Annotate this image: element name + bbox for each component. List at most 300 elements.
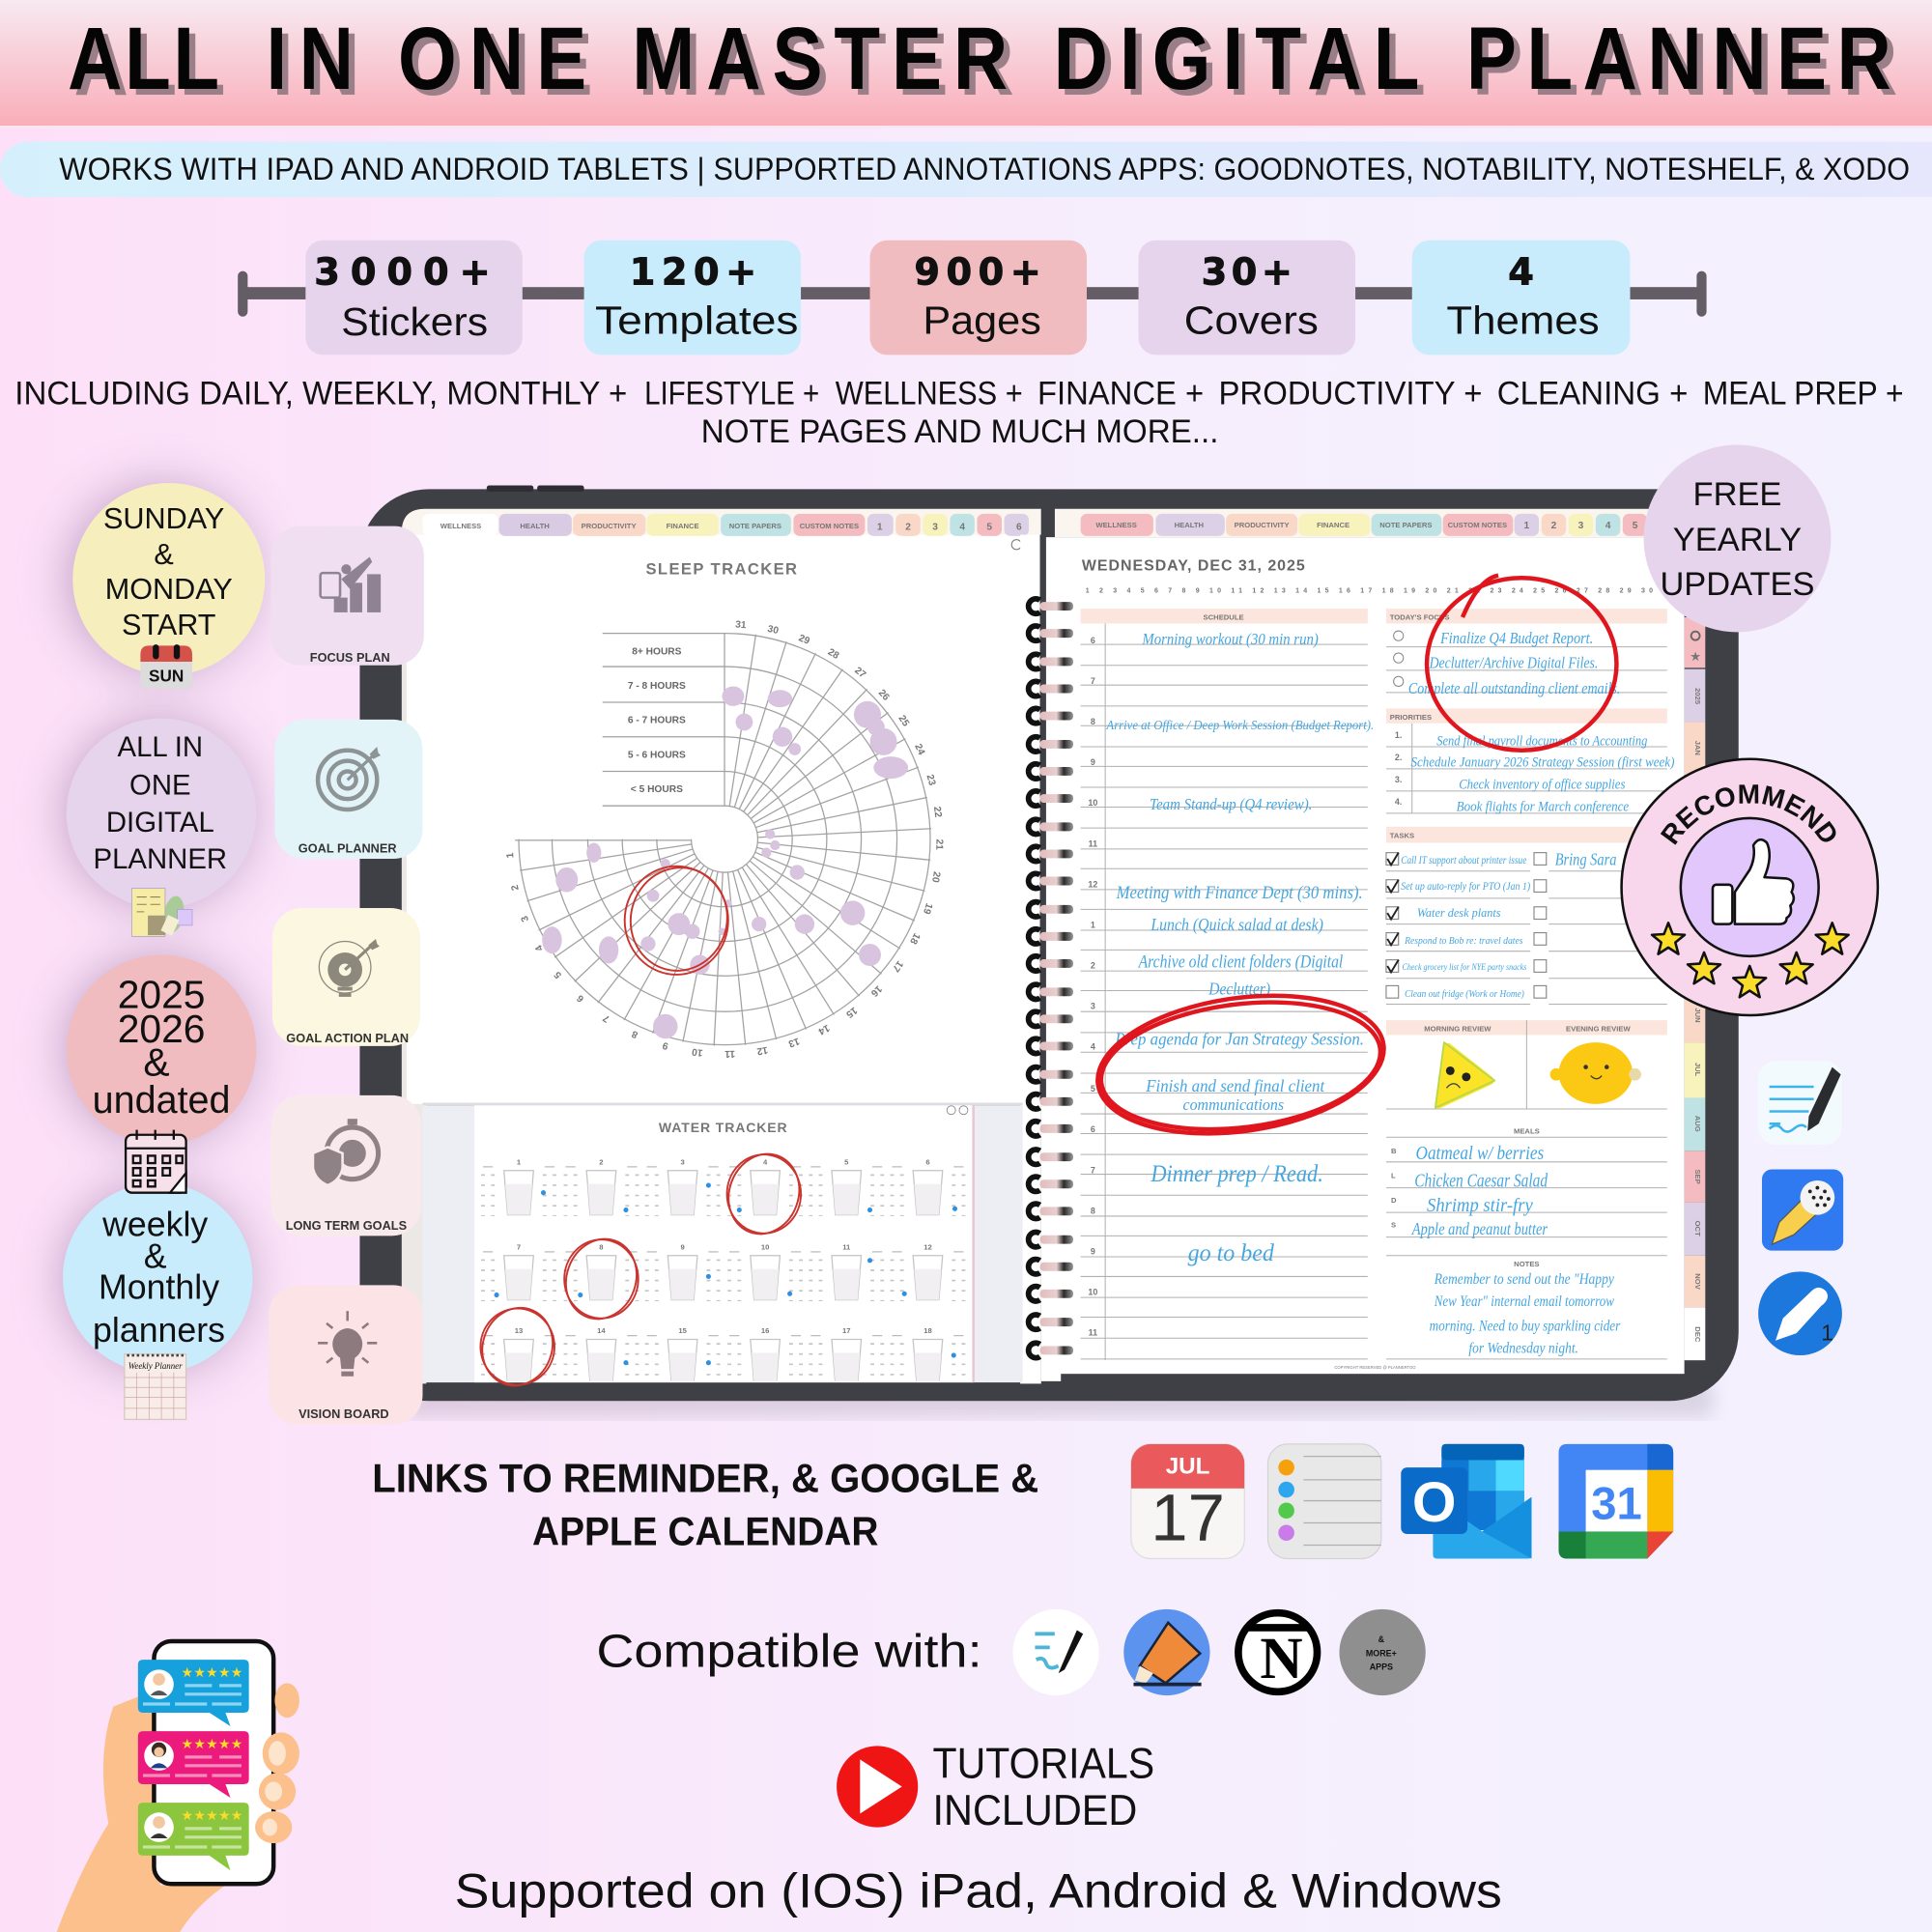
title banner: DIGITAL [1054,10,1419,108]
schedule column: Arrive at Office / Deep Work Session (Budget Report). [1105,718,1374,733]
card: focus plan [271,526,424,666]
tabs right page: 3 [1578,521,1584,531]
priorities: 2. [1395,753,1402,762]
schedule column: 10 [1088,798,1097,808]
month side tabs: DEC [1693,1326,1702,1343]
includes text: CLEANING + [1497,375,1688,412]
schedule column: go to bed [1188,1238,1274,1266]
tabs left page: 4 [959,522,965,532]
tabs left page [423,514,1029,536]
priorities: Check inventory of office supplies [1459,777,1626,792]
notes: NOTES [1514,1260,1540,1268]
priorities: 4. [1395,797,1402,807]
icon: reminders [1267,1444,1381,1559]
water cups grid: 3 [681,1157,685,1166]
icon: bulb and arrow [319,939,380,997]
month side tabs: 2025 [1693,688,1702,705]
includes text: NOTE PAGES AND MUCH MORE... [701,413,1218,450]
icon: outlook: O [1412,1471,1457,1534]
circle: sunday and monday start: START [122,609,216,641]
priorities: Send final payroll documents to Accounting [1436,734,1647,750]
left page: sleep tracker [407,514,1041,1104]
tasks: Bring Sara [1555,849,1617,868]
circle: all in one digital planner: ONE [129,770,191,802]
water cups grid: 15 [678,1326,688,1335]
review bubble: blue [138,1660,249,1726]
notes: Remember to send out the "Happy [1434,1271,1614,1288]
notes: for Wednesday night. [1468,1341,1578,1357]
tabs left page: HEALTH [520,522,550,530]
meals: B [1391,1147,1397,1155]
red scribble: agenda [1089,979,1393,1151]
sleep tracker radial chart: 2 [510,883,522,892]
sleep tracker radial chart: 13 [786,1036,801,1049]
heading: calendar links: APPLE CALENDAR [532,1508,878,1553]
circle: all in one digital planner: ALL IN [118,731,203,763]
sleep tracker radial chart: 7 - 8 HOURS [628,681,686,692]
water cups grid: 4 [763,1157,768,1166]
title banner: ALL [74,15,225,115]
schedule column: 11 [1089,838,1097,848]
schedule column: 9 [1091,1246,1095,1256]
sleep tracker radial chart: 23 [923,774,937,787]
sleep tracker radial chart: 25 [896,714,911,729]
icon: thumbs up [1713,839,1794,924]
circle: weekly and monthly planners: planners [93,1311,225,1350]
title banner: ONE [398,10,586,108]
water cups grid: 17 [842,1326,851,1335]
schedule column: SCHEDULE [1204,613,1244,622]
title banner [0,0,1932,128]
water cups grid: 7 [517,1242,521,1251]
tasks: Clean out fridge (Work or Home) [1405,988,1524,1000]
icon: play button [837,1746,918,1828]
heading: calendar links [372,1456,1038,1553]
badge: free yearly updates [1644,444,1831,632]
schedule column: Finish and send final client [1145,1076,1325,1095]
card: goal planner: GOAL PLANNER [298,841,397,856]
sleep tracker radial chart: 10 [691,1046,703,1058]
tabs left page: PRODUCTIVITY [582,522,637,530]
sleep tracker radial chart: 1 [505,852,516,859]
stat: stickers: Stickers [341,299,488,344]
sleep tracker radial chart: 16 [868,983,884,999]
sleep tracker radial chart: 29 [797,633,811,647]
heading: water tracker: WATER TRACKER [659,1120,788,1135]
meals [1386,1126,1667,1256]
tabs left page: CUSTOM NOTES [800,522,859,530]
meals: Apple and peanut butter [1411,1219,1548,1238]
tabs left page: NOTE PAPERS [729,522,781,530]
meals: S [1391,1220,1396,1229]
sleep tracker radial chart: 5 - 6 HOURS [628,750,686,760]
stat: templates: 120+ [630,251,756,295]
circle: sunday and monday start: SUNDAY [103,502,224,535]
red scribble: today's focus [1427,576,1616,751]
sleep tracker radial chart: 17 [890,958,905,974]
schedule column: 3 [1091,1002,1095,1011]
icon: sad triangle sticker [1435,1042,1494,1108]
sleep tracker radial chart: 5 [553,969,564,980]
includes text: INCLUDING DAILY, WEEKLY, MONTHLY + [14,375,627,412]
tasks [1386,827,1667,1005]
sleep tracker radial chart: 27 [852,666,867,681]
water cups grid: 11 [842,1242,851,1251]
icon: apple calendar: 17 [1151,1480,1225,1554]
stat: covers [1139,241,1355,355]
icon: outlook [1401,1444,1531,1559]
schedule column: 7 [1091,1165,1095,1175]
today's focus [1386,609,1667,697]
month side tabs: ★ [1690,652,1700,664]
badge: recommend: RECOMMEND [1660,784,1835,845]
tabs left page: FINANCE [667,522,699,530]
icon: pencil round [1123,1609,1210,1695]
schedule column: 8 [1091,1206,1095,1215]
title banner: DIGITAL [1060,15,1426,115]
badge: free yearly updates: FREE [1693,476,1781,513]
icon: more apps: APPS [1370,1662,1393,1671]
morning and evening review: EVENING REVIEW [1566,1025,1631,1034]
text: supported platforms: Supported on (IOS) iPad, Android & Windows [455,1863,1502,1918]
tasks: Respond to Bob re: travel dates [1404,935,1523,947]
stat: themes: Themes [1446,298,1600,343]
stat: pages: 900+ [914,251,1041,295]
title banner: IN [266,10,354,108]
tabs right page: FINANCE [1317,521,1350,529]
water cups grid: 12 [923,1242,932,1251]
sleep tracker radial chart: 8 [630,1028,639,1039]
sleep tracker radial chart: 7 [601,1012,611,1024]
text: tutorials included [933,1741,1154,1834]
schedule column: Archive old client folders (Digital [1137,952,1343,972]
day number strip: 1 2 3 4 5 6 7 8 9 10 11 12 13 14 15 16 17 18 19 20 21 22 23 24 25 26 27 28 29 30 31 [1086,588,1675,595]
icon: weekly planner sheet: Weekly Planner [128,1361,183,1371]
card: vision board [269,1285,423,1424]
sleep tracker radial chart: 12 [755,1044,769,1057]
circle: all in one digital planner: DIGITAL [106,807,214,838]
review bubble: green [138,1803,249,1870]
tabs right page: CUSTOM NOTES [1448,521,1507,529]
schedule column: 6 [1091,1124,1095,1134]
tasks: Check grocery list for NYE party snacks [1403,962,1527,973]
badge: free yearly updates: UPDATES [1660,566,1814,603]
schedule column: 12 [1088,879,1097,889]
tabs right page: 1 [1524,521,1530,531]
priorities: PRIORITIES [1390,713,1432,722]
review bubble: blue: ★★★★★ [182,1665,243,1681]
badge: recommend [1620,757,1880,1016]
tabs right page [1081,514,1647,536]
stat: stickers: 3000+ [314,251,491,295]
icon: focus plan chart [321,557,381,612]
title banner: IN [272,15,359,115]
card: focus plan: FOCUS PLAN [310,650,390,665]
sleep tracker radial chart: 6 - 7 HOURS [628,716,686,726]
circle: all in one digital planner [67,719,256,936]
sleep tracker radial chart [505,619,944,1059]
priorities: 1. [1395,730,1402,740]
sleep tracker radial chart: 6 [575,992,586,1004]
tasks: Water desk plants [1417,906,1501,920]
circle: weekly and monthly planners: & [144,1236,167,1275]
water cups grid: 10 [761,1242,769,1251]
notes [1386,1260,1667,1359]
icon: goodnotes round [1012,1609,1099,1695]
sleep tracker radial chart: 4 [533,943,546,952]
circle: sunday and monday start: & [154,538,174,571]
icon: google calendar [1559,1444,1673,1559]
title banner: ONE [404,15,593,115]
today's focus: TODAY'S FOCUS [1390,613,1449,622]
schedule column: Meeting with Finance Dept (30 mins). [1116,883,1363,903]
tabs left page: WELLNESS [440,522,481,530]
sleep tracker radial chart: 14 [816,1022,831,1037]
circle: all in one digital planner: PLANNER [94,843,227,875]
sleep tracker radial chart: 28 [826,647,841,662]
stats timeline [238,241,1707,355]
icon: notion round: N [1260,1626,1303,1691]
icon: planner pages [131,889,192,936]
stat: themes [1412,241,1631,355]
tabs right page: PRODUCTIVITY [1235,521,1290,529]
copyright: COPYRIGHT RESERVED @ PLANNERTOO [1334,1365,1416,1370]
includes text: MEAL PREP + [1703,375,1904,412]
includes text: LIFESTYLE + [644,375,819,412]
schedule column: 2 [1091,961,1095,971]
circle: 2025 2026 and undated: undated [93,1079,231,1122]
tabs left page: 6 [1016,522,1022,532]
title banner: ALL [68,10,219,108]
red scribble circles on cups [471,1144,810,1396]
badge: free yearly updates: YEARLY [1673,522,1802,558]
circle: 2025 2026 and undated [67,955,256,1193]
meals: L [1391,1171,1396,1179]
priorities [1386,708,1675,814]
text: tutorials included: INCLUDED [933,1787,1137,1834]
tasks: Call IT support about printer issue [1401,855,1526,867]
priorities: Schedule January 2026 Strategy Session (first week) [1410,754,1675,770]
meals: D [1391,1196,1397,1205]
schedule column: Declutter) [1208,979,1270,999]
includes text: WELLNESS + [836,375,1023,412]
tabs left page: 3 [932,522,938,532]
left column circle shadows [67,491,250,1367]
sleep tracker radial chart: 21 [933,838,944,850]
heading: calendar links: LINKS TO REMINDER, & GOOGLE & [372,1456,1038,1501]
icon: calendar outline [126,1130,186,1193]
sleep tracker radial chart: 30 [766,624,780,637]
schedule column: 7 [1091,676,1095,686]
schedule column: 5 [1091,1084,1095,1094]
sleep tracker radial chart: 31 [735,619,747,631]
month side tabs: JUL [1693,1063,1702,1077]
card: long term goals [271,1095,421,1236]
icon: notability app [1762,1169,1843,1251]
circle: weekly and monthly planners: weekly [101,1205,208,1243]
water cups grid: 2 [599,1157,604,1166]
schedule column: 11 [1089,1328,1097,1338]
stat: covers: 30+ [1202,251,1293,295]
icon: google calendar: 31 [1591,1479,1642,1530]
schedule column: Morning workout (30 min run) [1142,630,1319,648]
water tracker panel [423,1103,1023,1396]
stat: stickers [305,241,523,355]
icon: pen app [1758,1271,1842,1355]
sleep tracker radial chart: 9 [661,1039,669,1051]
month side tabs [1685,617,1705,1360]
sleep tracker radial chart: 19 [921,901,934,916]
water cups grid: 5 [844,1157,849,1166]
schedule column: 6 [1091,636,1095,645]
icon: target [318,747,381,810]
spiral binding [1029,599,1073,1358]
icon: apple calendar [1131,1444,1244,1559]
heading: sleep tracker: SLEEP TRACKER [645,559,798,578]
sleep tracker radial chart: 26 [876,688,892,703]
icon: sun calendar: SUN [149,666,184,685]
month side tabs: NOV [1693,1273,1702,1291]
schedule column: 1 [1091,920,1095,929]
sleep tracker radial chart: 15 [843,1005,859,1019]
schedule column: 8 [1091,717,1095,726]
circle: sunday and monday start: MONDAY [105,573,233,606]
icon: pen app: 1 [1821,1321,1833,1346]
card: goal action plan: GOAL ACTION PLAN [286,1031,409,1045]
water cups grid: 16 [761,1326,769,1335]
tabs left page: 1 [877,522,883,532]
stat: pages: Pages [923,298,1041,343]
stat: templates: Templates [595,298,799,343]
schedule column: Prep agenda for Jan Strategy Session. [1114,1030,1364,1049]
icon: more apps [1339,1609,1426,1695]
review bubble: pink [138,1731,249,1798]
compatibility band [0,142,1932,197]
heading: compatible with: Compatible with: [596,1626,982,1678]
stat: covers: Covers [1184,298,1319,343]
today's focus: Complete all outstanding client emails. [1408,679,1620,697]
sleep tracker radial chart: 18 [907,931,922,946]
tablet frame [359,486,1739,1417]
stat: themes: 4 [1508,251,1534,295]
water cups grid: 8 [599,1242,604,1251]
icon: notion round [1238,1613,1318,1691]
card: vision board: VISION BOARD [298,1406,389,1421]
schedule column: 10 [1088,1288,1097,1297]
includes text: PRODUCTIVITY + [1218,375,1482,412]
circle: weekly and monthly planners [63,1182,252,1419]
priorities: Book flights for March conference [1457,799,1630,814]
month side tabs: SEP [1693,1169,1702,1184]
today's focus: Finalize Q4 Budget Report. [1439,629,1593,647]
icon: light bulb [318,1311,377,1377]
circle: 2025 2026 and undated: & [143,1040,170,1085]
water cups grid: 14 [597,1326,606,1335]
icon: weekly planner sheet [125,1354,186,1419]
tabs left page: 5 [986,522,992,532]
review bubble: pink: ★★★★★ [182,1737,243,1752]
tabs left page: 2 [905,522,911,532]
tasks: Set up auto-reply for PTO (Jan 1) [1401,881,1530,893]
icon: sun calendar [140,644,192,689]
month side tabs: AUG [1693,1116,1702,1132]
compatibility band: WORKS WITH IPAD AND ANDROID TABLETS | [59,152,705,186]
text: tutorials included: TUTORIALS [933,1741,1154,1788]
circle: weekly and monthly planners: Monthly [99,1267,219,1306]
right page: daily planner [1046,514,1705,1374]
red scribble circle [619,857,739,981]
water cups grid: 6 [925,1157,930,1166]
tabs right page: 5 [1633,521,1638,531]
meals: Oatmeal w/ berries [1416,1143,1544,1164]
circle: sunday and monday start [72,483,265,689]
illustration: hand holding phone with reviews [57,1641,299,1932]
sleep tracker radial chart: 8+ HOURS [632,646,682,657]
sleep tracker radial chart: < 5 HOURS [631,784,683,795]
sleep tracker radial chart: 22 [931,806,943,818]
water cups grid: 1 [517,1157,522,1166]
schedule column: communications [1182,1095,1284,1114]
tabs right page: HEALTH [1175,521,1204,529]
review bubble: green: ★★★★★ [182,1808,243,1824]
morning and evening review [1386,1020,1667,1109]
water cups grid: 9 [681,1242,685,1251]
water cups grid: 13 [515,1326,523,1335]
schedule column: 4 [1091,1042,1095,1052]
stat: templates [584,241,801,355]
schedule column: Team Stand-up (Q4 review). [1150,795,1312,813]
water cups grid: 18 [923,1326,932,1335]
includes text: FINANCE + [1037,375,1204,412]
sleep tracker radial chart: 11 [724,1048,735,1059]
tasks: TASKS [1390,831,1414,839]
sleep tracker radial chart: 3 [520,914,531,923]
month side tabs: OCT [1693,1221,1702,1236]
notes: morning. Need to buy sparkling cider [1430,1319,1620,1335]
tabs right page: 2 [1551,521,1557,531]
includes text [14,375,1904,450]
icon: more apps: & [1378,1634,1385,1644]
stat: pages [870,241,1087,355]
title banner: PLANNER [1472,15,1897,115]
morning and evening review: MORNING REVIEW [1424,1025,1492,1034]
tabs right page: 4 [1605,521,1611,531]
title banner: MASTER [632,10,1008,108]
card: long term goals: LONG TERM GOALS [286,1218,407,1233]
schedule column: Dinner prep / Read. [1150,1159,1323,1187]
icon: shield and stopwatch [313,1119,379,1185]
sleep tracker radial chart: 20 [929,870,942,884]
tabs right page: WELLNESS [1095,521,1137,529]
schedule column [1081,609,1374,1360]
notes: New Year" internal email tomorrow [1434,1293,1615,1310]
month side tabs: JUN [1693,1008,1702,1023]
circle: 2025 2026 and undated: 2026 [118,1007,205,1051]
meals: MEALS [1514,1126,1540,1135]
card: goal planner [274,720,423,859]
meals: Shrimp stir-fry [1427,1195,1534,1216]
tabs right page: NOTE PAPERS [1379,521,1432,529]
meals: Chicken Caesar Salad [1414,1170,1548,1191]
today's focus: Declutter/Archive Digital Files. [1429,653,1598,671]
month side tabs: JAN [1693,741,1702,755]
spine [1020,509,1061,1383]
priorities: 3. [1395,775,1402,784]
water cups grid [483,1157,963,1385]
icon: more apps: MORE+ [1366,1648,1397,1658]
title banner: PLANNER [1466,10,1891,108]
icon: smiling lemon sticker [1550,1042,1641,1104]
